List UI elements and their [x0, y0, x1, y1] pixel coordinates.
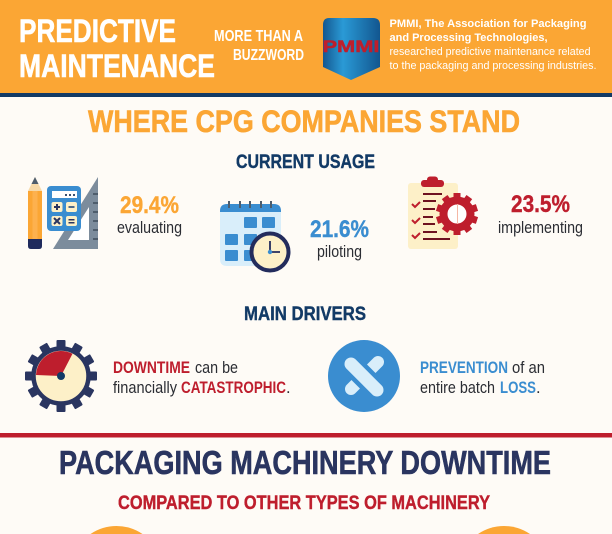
- stat: piloting: 21.6%: [310, 216, 369, 243]
- PMMI description: [390, 18, 596, 72]
- subtitle: [214, 28, 304, 64]
- text: prevention: LOSS: [500, 379, 536, 397]
- stat: evaluating: [117, 192, 182, 237]
- subtitle: BUZZWORD: [233, 47, 304, 64]
- PMMI description: PMMI, The Association for Packaging: [390, 18, 586, 30]
- heading: where CPG companies stand: WHERE CPG COMPANIES STAND: [88, 103, 520, 139]
- icon: right orange circle: [478, 526, 530, 534]
- stat: implementing: implementing: [498, 219, 583, 237]
- text: downtime: CATASTROPHIC: [181, 379, 286, 397]
- icon: downtime gear gauge: [25, 340, 97, 412]
- title: MAINTENANCE: [19, 48, 215, 84]
- stat: evaluating: 29.4%: [120, 192, 179, 219]
- title: [19, 13, 215, 84]
- subtitle: MORE THAN A: [214, 28, 303, 45]
- icon: calendar and clock: [220, 201, 288, 270]
- stat: evaluating: evaluating: [117, 219, 182, 237]
- text: downtime: [113, 359, 291, 397]
- text: downtime: .: [286, 379, 291, 397]
- icon: left orange circle: [90, 526, 142, 534]
- text: downtime: can be: [195, 359, 238, 377]
- stat: implementing: [498, 191, 583, 237]
- stat: implementing: 23.5%: [511, 191, 570, 218]
- icon: pencil, calculator and set square: [28, 177, 98, 249]
- text: downtime: DOWNTIME: [113, 359, 190, 377]
- text: prevention: [420, 359, 545, 397]
- icon: PMMI logo: PMMI: [322, 37, 380, 56]
- header band: [0, 0, 612, 97]
- PMMI description: researched predictive maintenance related: [390, 46, 590, 58]
- PMMI description: to the packaging and processing industries.: [390, 60, 596, 72]
- heading: current usage: CURRENT USAGE: [236, 152, 375, 173]
- text: prevention: entire batch: [420, 379, 495, 397]
- stat: piloting: piloting: [317, 243, 362, 261]
- PMMI description: and Processing Technologies,: [390, 32, 548, 44]
- heading: main drivers: MAIN DRIVERS: [244, 304, 366, 325]
- title: PREDICTIVE: [19, 13, 176, 49]
- icon: clipboard and gear: [408, 176, 478, 249]
- icon: PMMI logo: [322, 18, 380, 80]
- stat: piloting: [310, 216, 369, 261]
- icon: bandage: [328, 340, 400, 412]
- text: prevention: PREVENTION: [420, 359, 508, 377]
- text: prevention: of an: [512, 359, 545, 377]
- subheading: compared to other types: COMPARED TO OTHER TYPES OF MACHINERY: [118, 493, 490, 514]
- text: prevention: .: [536, 379, 541, 397]
- text: downtime: financially: [113, 379, 178, 397]
